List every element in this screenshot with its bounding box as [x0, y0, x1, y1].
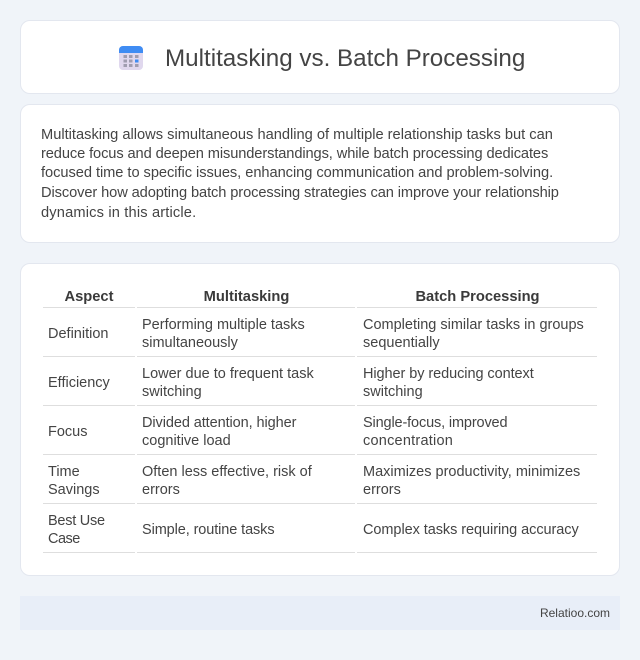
table row: definition: simultaneously: [142, 335, 238, 351]
table header: Multitasking: [204, 289, 289, 305]
text block: intro paragraph: Discover how adopting batch processing strategies can improve your relationship: [41, 185, 559, 201]
table row: time savings: Maximizes productivity, minimizes: [363, 464, 580, 480]
table row: definition: sequentially: [363, 335, 440, 351]
text block: intro paragraph: Multitasking allows simultaneous handling of multiple relationship tasks but can: [41, 127, 553, 143]
table row: definition: Completing similar tasks in groups: [363, 317, 584, 333]
table row: efficiency: Higher by reducing context: [363, 366, 534, 382]
footer bar: [20, 596, 620, 630]
table row: focus: Focus: [48, 424, 88, 440]
table row: best use case: Simple, routine tasks: [142, 522, 274, 538]
table row: time savings: Savings: [48, 482, 100, 498]
table row: focus: cognitive load: [142, 433, 231, 449]
table row: best use case: Complex tasks requiring accuracy: [363, 522, 579, 538]
table row: time savings: errors: [363, 482, 401, 498]
table row: time savings: errors: [142, 482, 180, 498]
text block: intro paragraph: [41, 127, 559, 221]
table row: focus: Single-focus, improved: [363, 415, 507, 431]
table row: efficiency: switching: [363, 384, 423, 400]
title: Multitasking vs. Batch Processing: [165, 45, 525, 72]
table row: efficiency: switching: [142, 384, 202, 400]
table row: best use case: Best Use: [48, 513, 105, 529]
table header: Batch Processing: [415, 289, 540, 305]
table row: time savings: Time: [48, 464, 80, 480]
table row: definition: Performing multiple tasks: [142, 317, 305, 333]
table row: time savings: [48, 464, 580, 498]
table row: focus: [48, 415, 507, 449]
table row: definition: Definition: [48, 326, 108, 342]
table row: time savings: Often less effective, risk of: [142, 464, 312, 480]
table row: best use case: Case: [48, 531, 80, 547]
table row: efficiency: Efficiency: [48, 375, 110, 391]
text block: intro paragraph: focused time to specific issues, enhancing communication and problem-solving.: [41, 165, 553, 181]
table header: [64, 289, 540, 305]
panel: title card: [20, 20, 620, 94]
footer text: Relatioo.com: [540, 606, 610, 620]
text block: intro paragraph: reduce focus and deepen misunderstandings, while batch processing dedicates: [41, 146, 548, 162]
icon: calendar: [119, 46, 143, 70]
table row: focus: Divided attention, higher: [142, 415, 296, 431]
table row: efficiency: Lower due to frequent task: [142, 366, 314, 382]
panel: comparison table: [20, 263, 620, 576]
table header: Aspect: [64, 289, 113, 305]
table row: focus: concentration: [363, 433, 453, 449]
table row: definition: [48, 317, 584, 351]
text block: intro paragraph: dynamics in this article.: [41, 205, 196, 221]
table row: best use case: [48, 513, 579, 547]
panel: intro text: [20, 104, 620, 243]
table row: efficiency: [48, 366, 534, 400]
